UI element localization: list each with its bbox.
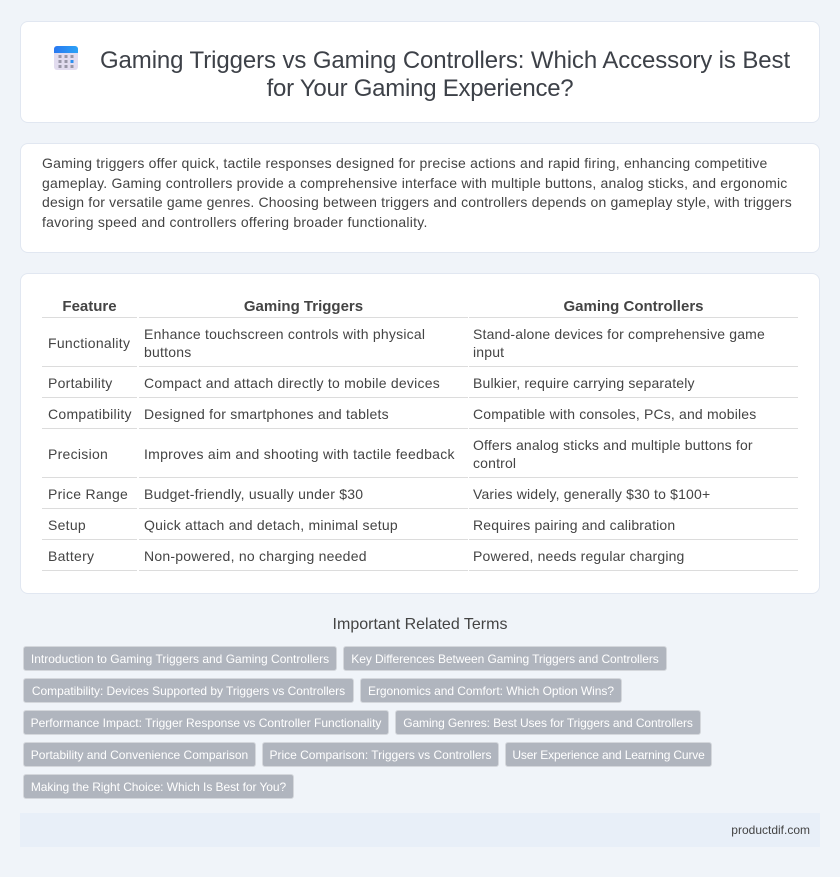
text block: introduction: favoring speed and controllers offering broader functionality. [42, 214, 428, 230]
related terms tags: Key Differences Between Gaming Triggers and Controllers [351, 652, 659, 666]
comparison table: Precision [48, 446, 108, 462]
panel: comparison table [20, 273, 820, 594]
comparison table: control [473, 455, 516, 471]
related terms tags: Gaming Genres: Best Uses for Triggers and Controllers [403, 716, 693, 730]
related terms tags [23, 646, 712, 799]
comparison table: Quick attach and detach, minimal setup [144, 517, 398, 533]
comparison table: Non-powered, no charging needed [144, 548, 367, 564]
related terms tags: User Experience and Learning Curve [512, 748, 705, 762]
comparison table: Requires pairing and calibration [473, 517, 675, 533]
comparison table: Gaming Triggers [244, 298, 363, 315]
footer source: productdif.com [731, 823, 810, 837]
text block: introduction: design for versatile game genres. Choosing between triggers and controllers depends on gameplay style, with triggers [42, 194, 792, 210]
comparison table: Price Range [48, 486, 128, 502]
comparison table: Varies widely, generally $30 to $100+ [473, 486, 710, 502]
comparison table: Designed for smartphones and tablets [144, 406, 389, 422]
comparison table: Budget-friendly, usually under $30 [144, 486, 363, 502]
comparison table: Bulkier, require carrying separately [473, 375, 695, 391]
text block: introduction: Gaming triggers offer quick, tactile responses designed for precise actions and rapid firing, enhancing competitive [42, 155, 767, 171]
comparison table: Stand-alone devices for comprehensive game [473, 326, 765, 342]
related terms tags: Making the Right Choice: Which Is Best for You? [31, 780, 286, 794]
footer bar [20, 813, 820, 847]
comparison table: Feature [62, 298, 117, 315]
comparison table: Compatible with consoles, PCs, and mobiles [473, 406, 756, 422]
comparison table: Battery [48, 548, 94, 564]
title: for Your Gaming Experience? [267, 75, 573, 102]
related terms tags: Ergonomics and Comfort: Which Option Wins? [368, 684, 614, 698]
comparison table: Offers analog sticks and multiple buttons for [473, 437, 753, 453]
comparison table: Powered, needs regular charging [473, 548, 685, 564]
title [100, 47, 790, 102]
text block: introduction [42, 155, 792, 230]
heading: related terms: Important Related Terms [333, 616, 507, 633]
comparison table: Compact and attach directly to mobile devices [144, 375, 440, 391]
comparison table: buttons [144, 344, 192, 360]
related terms tags: Introduction to Gaming Triggers and Gaming Controllers [31, 652, 329, 666]
comparison table: Improves aim and shooting with tactile feedback [144, 446, 455, 462]
panel: title card [20, 21, 820, 123]
panel: introduction [20, 143, 820, 253]
comparison table: Setup [48, 517, 86, 533]
comparison table: Gaming Controllers [563, 298, 704, 315]
related terms tags: Performance Impact: Trigger Response vs Controller Functionality [31, 716, 381, 730]
title: Gaming Triggers vs Gaming Controllers: Which Accessory is Best [100, 47, 790, 74]
comparison table: Compatibility [48, 406, 132, 422]
comparison table [42, 298, 798, 571]
text block: introduction: gameplay. Gaming controllers provide a comprehensive interface with multiple buttons, analog sticks, and ergonomic [42, 175, 787, 191]
related terms tags: Portability and Convenience Comparison [31, 748, 248, 762]
comparison table: input [473, 344, 504, 360]
related terms tags: Compatibility: Devices Supported by Triggers vs Controllers [32, 684, 345, 698]
icon: calendar grid [54, 46, 78, 70]
comparison table: Enhance touchscreen controls with physical [144, 326, 425, 342]
related terms tags: Price Comparison: Triggers vs Controllers [269, 748, 492, 762]
comparison table: Functionality [48, 335, 130, 351]
comparison table: Portability [48, 375, 113, 391]
